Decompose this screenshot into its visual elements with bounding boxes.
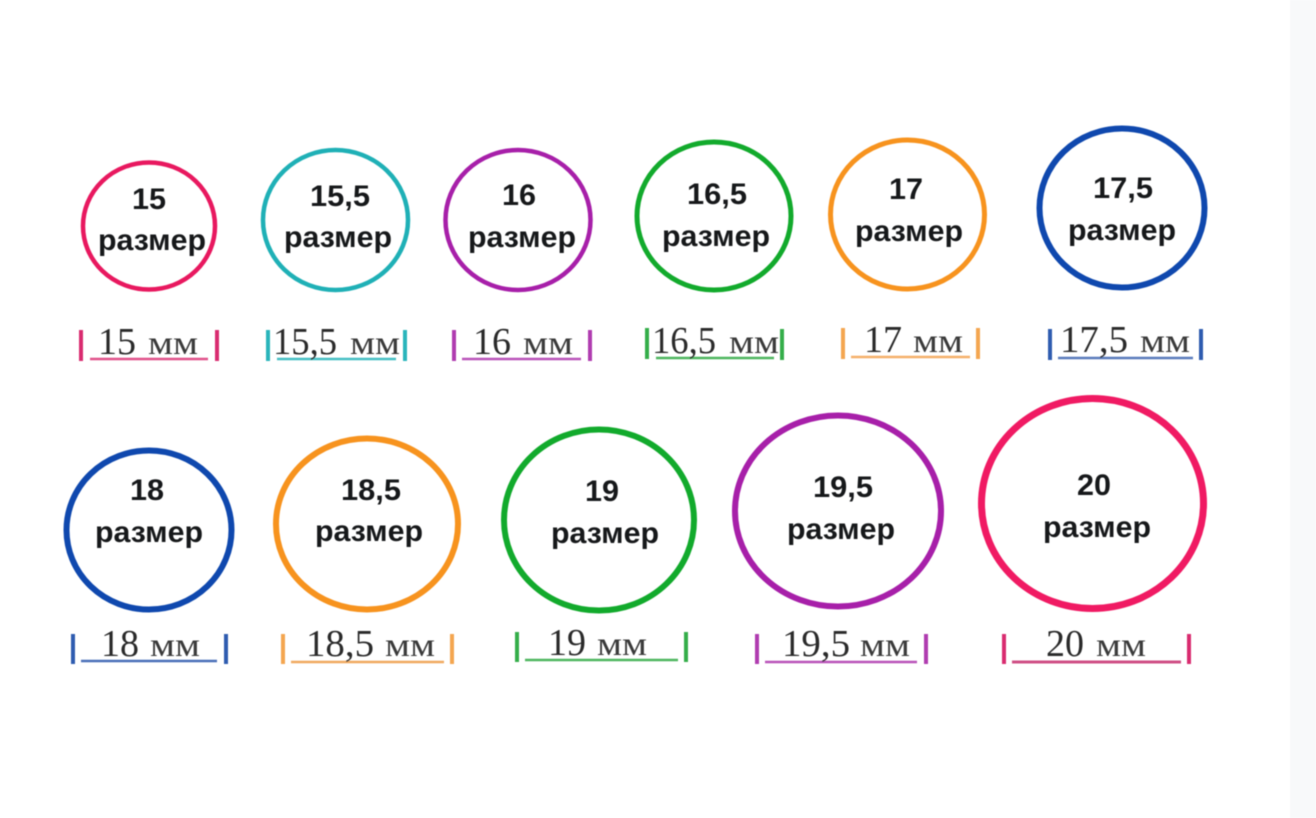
ring: size 19: размер xyxy=(551,517,659,550)
ring: size 16: 16 xyxy=(502,179,536,212)
ring: size 19: 19 xyxy=(585,475,619,508)
measure: 18 mm xyxy=(73,623,226,665)
ring: size 17: размер xyxy=(855,215,963,248)
ring: size 16,5: 16,5 xyxy=(687,178,747,211)
measure: 17 mm: мм xyxy=(913,323,963,360)
measure: 16 mm xyxy=(454,321,590,363)
ring: size 17,5: 17,5 xyxy=(1093,172,1153,205)
measure: 19,5 mm xyxy=(757,623,926,665)
measure: 16,5 mm: мм xyxy=(729,324,779,361)
measure: 19 mm xyxy=(517,622,686,664)
measure: 15,5 mm xyxy=(268,321,405,363)
measure: 17 mm xyxy=(843,319,978,361)
measure: 15 mm: 15 xyxy=(98,321,136,363)
measure: 17,5 mm xyxy=(1050,319,1201,361)
measure: 19,5 mm: мм xyxy=(860,627,910,664)
measure: 16,5 mm: 16,5 xyxy=(652,320,716,362)
ring: size 15: размер xyxy=(98,224,206,257)
measure: 15,5 mm: 15,5 xyxy=(273,321,337,363)
ring: size 19,5: 19,5 xyxy=(813,471,873,504)
measure: 16,5 mm xyxy=(647,320,782,362)
ring: size 15,5: размер xyxy=(284,221,392,254)
ring: size 15,5: 15,5 xyxy=(310,180,370,213)
measure: 20 mm: мм xyxy=(1096,627,1146,664)
ring: size 18: размер xyxy=(95,516,203,549)
ring: size 18,5 xyxy=(276,438,458,610)
measure: 20 mm xyxy=(1004,623,1189,665)
measure: 15,5 mm: мм xyxy=(350,325,400,362)
ring: size 19,5: размер xyxy=(787,513,895,546)
ring: size 20: размер xyxy=(1043,511,1151,544)
measure: 18,5 mm: мм xyxy=(385,627,435,664)
measure: 17,5 mm: мм xyxy=(1140,323,1190,360)
ring: size 15 xyxy=(83,162,215,290)
ring: size 19,5 xyxy=(735,416,941,606)
measure: 19,5 mm: 19,5 xyxy=(782,623,850,665)
ring: size 16: размер xyxy=(468,221,576,254)
ring: size 17 xyxy=(830,140,984,289)
ring: size 16 xyxy=(446,150,590,290)
measure: 17,5 mm: 17,5 xyxy=(1060,319,1128,361)
ring: size 17,5 xyxy=(1040,128,1204,288)
measure: 16 mm: 16 xyxy=(473,321,511,363)
measure: 19 mm: мм xyxy=(597,626,647,663)
ring: size 20 xyxy=(982,398,1204,608)
measure: 17 mm: 17 xyxy=(864,319,902,361)
measure: 18,5 mm: 18,5 xyxy=(306,623,374,665)
measure: 15 mm: мм xyxy=(148,325,198,362)
ring: size 16,5: размер xyxy=(662,220,770,253)
ring: size 15,5 xyxy=(263,150,408,290)
measure: 15 mm xyxy=(81,321,217,363)
measure: 18,5 mm xyxy=(283,623,452,665)
ring: size 18,5: размер xyxy=(315,515,423,548)
ring: size 18,5: 18,5 xyxy=(341,474,401,507)
measure: 18 mm: мм xyxy=(150,627,200,664)
ring: size 15: 15 xyxy=(132,183,166,216)
ring: size 17,5: размер xyxy=(1068,214,1176,247)
measure: 20 mm: 20 xyxy=(1046,623,1084,665)
ring: size 19 xyxy=(504,430,694,610)
ring: size 16,5 xyxy=(637,142,791,290)
measure: 16 mm: мм xyxy=(523,325,573,362)
ring: size 18 xyxy=(66,450,232,610)
measure: 18 mm: 18 xyxy=(101,623,139,665)
ring: size 20: 20 xyxy=(1077,469,1111,502)
ring: size 18: 18 xyxy=(130,474,164,507)
measure: 19 mm: 19 xyxy=(548,622,586,664)
ring: size 17: 17 xyxy=(889,173,923,206)
